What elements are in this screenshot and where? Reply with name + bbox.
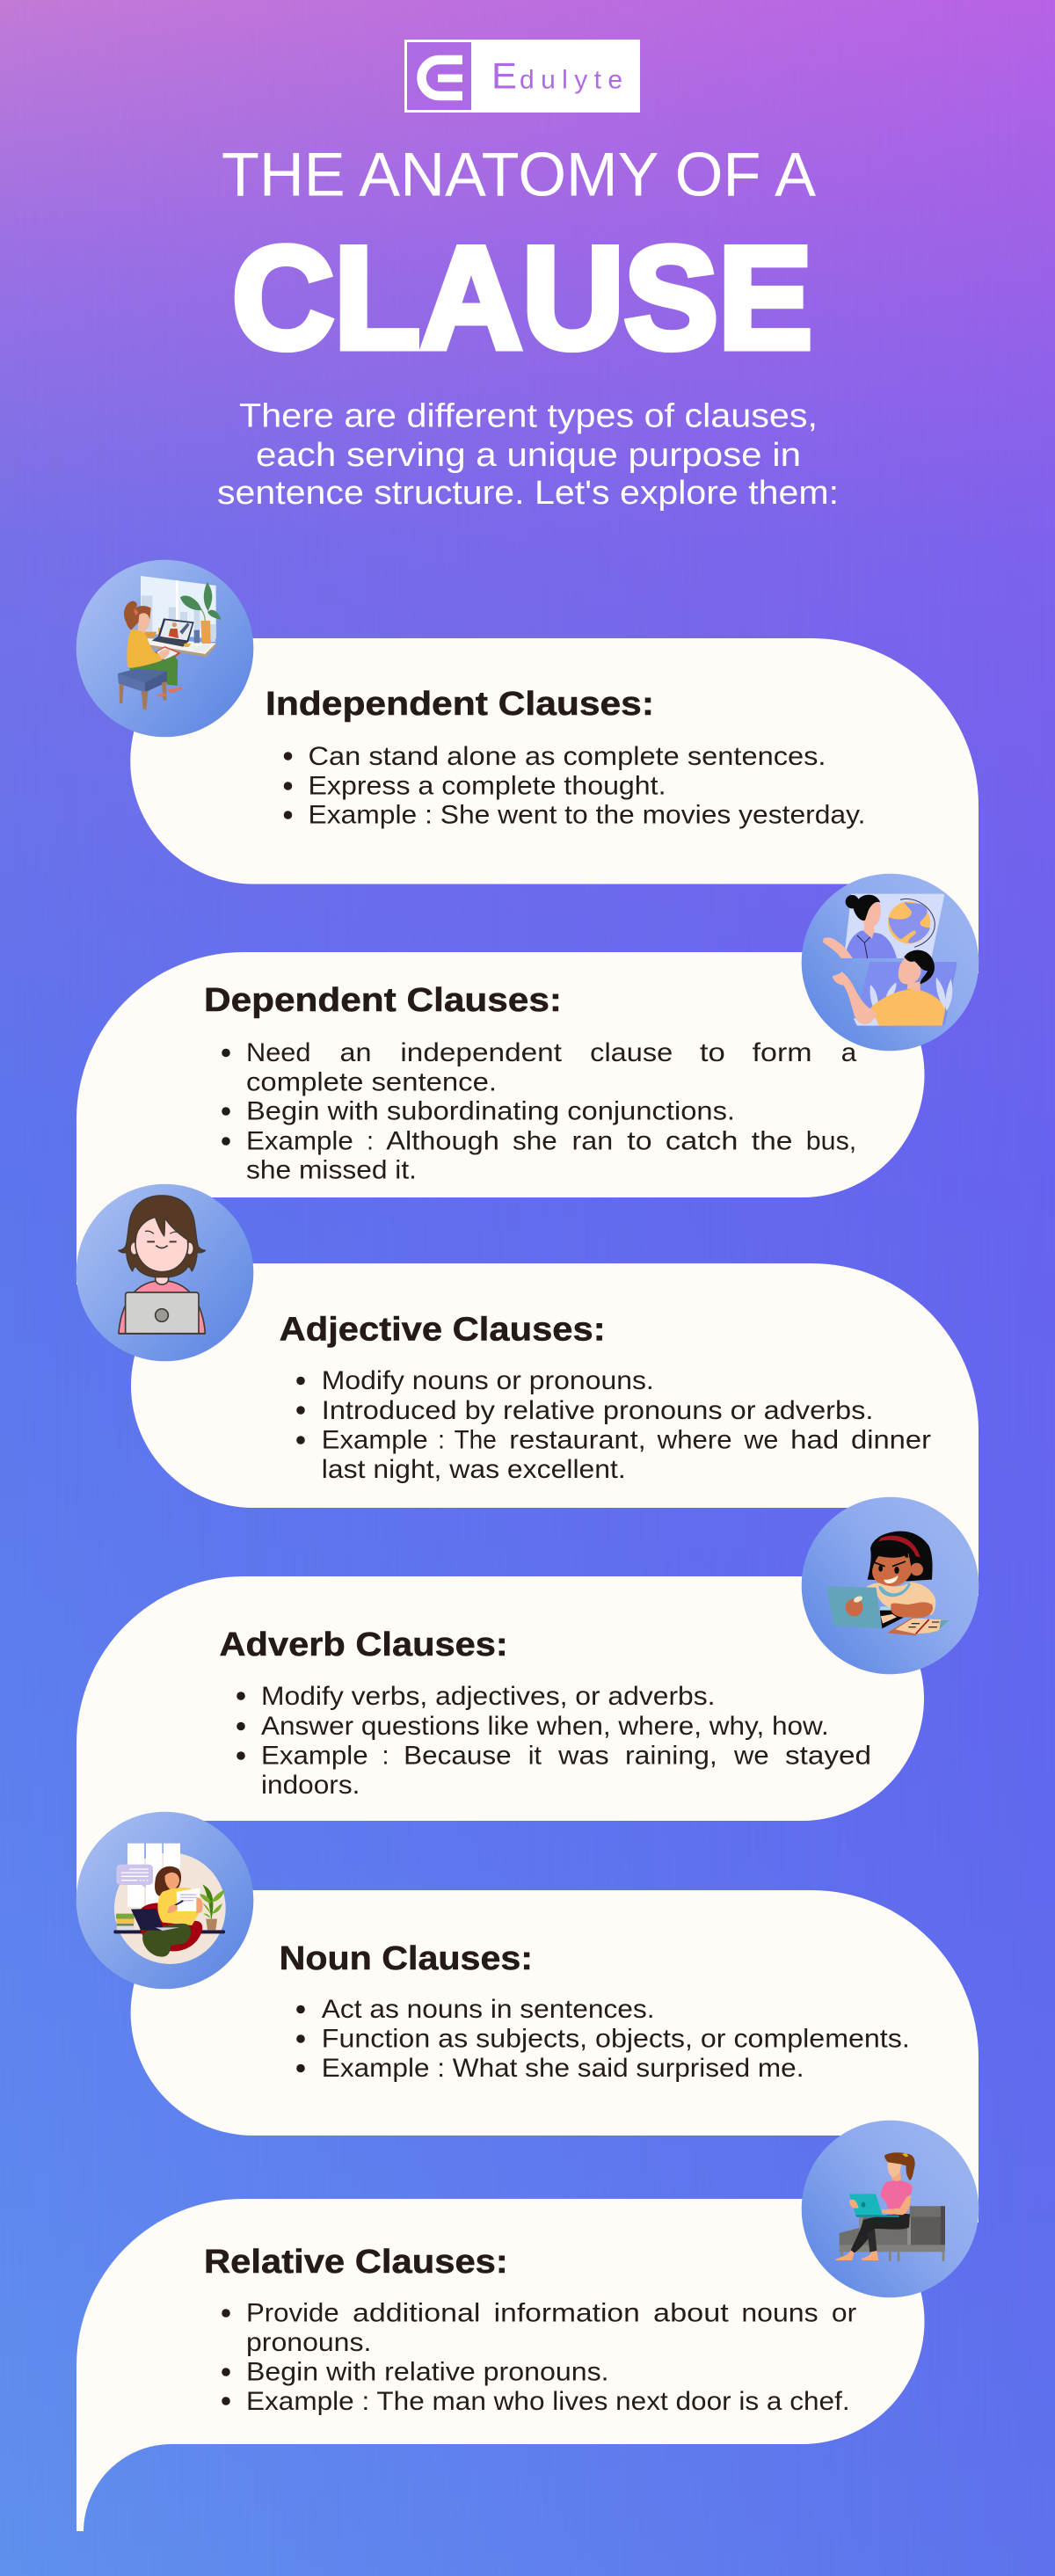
bullet list: dependent clauses: Example: [246, 1127, 353, 1155]
bullet list: independent clauses: Express a complete thought.: [308, 772, 666, 801]
bullet list: relative clauses: Begin with relative pronouns.: [246, 2358, 609, 2387]
bullet list: relative clauses: information: [494, 2298, 640, 2327]
intro paragraph: There are different types of clauses,: [239, 398, 818, 435]
bullet list: adverb clauses: Modify verbs, adjectives, or adverbs.: [261, 1682, 716, 1711]
bullet list: adjective clauses: :: [438, 1425, 445, 1454]
title line: The anatomy of a: THE ANATOMY OF A: [222, 140, 816, 209]
bullet list: noun clauses: Example : What she said surprised me.: [322, 2054, 804, 2083]
icon: woman reading on chair with laptop: [76, 1812, 253, 1989]
intro paragraph: each serving a unique purpose in: [256, 437, 801, 474]
bullet list: relative clauses: Example : The man who lives next door is a chef.: [246, 2387, 850, 2416]
bullet list: adverb clauses: Because: [404, 1742, 512, 1771]
bullet list: dependent clauses: form: [753, 1038, 812, 1067]
bullet list: dependent clauses: :: [367, 1127, 374, 1155]
bullet list: independent clauses: Can stand alone as complete sentences.: [308, 742, 826, 771]
logo: Edulyte: dulyte: [520, 66, 622, 95]
bullet list: dependent clauses: to: [627, 1127, 652, 1155]
bullet list: adjective clauses: Example: [322, 1425, 428, 1454]
panel: noun clauses: [131, 1890, 979, 2223]
bullet list: adjective clauses: had: [790, 1425, 839, 1454]
bullet list: dependent clauses: Need: [246, 1038, 311, 1067]
bullet list: dependent clauses: clause: [590, 1038, 673, 1067]
icon: two people on a video call with globe: [802, 874, 979, 1051]
bullet list: adverb clauses: we: [733, 1742, 769, 1771]
icon: child with laptop and book: [802, 1497, 979, 1674]
bullet list: dependent clauses: the: [752, 1127, 793, 1155]
heading: dependent clauses: Dependent Clauses:: [204, 982, 562, 1019]
bullet list: relative clauses: additional: [353, 2298, 480, 2327]
bullet list: relative clauses: [222, 2298, 856, 2416]
bullet list: adjective clauses: The: [455, 1425, 497, 1454]
bullet list: relative clauses: Provide: [246, 2298, 339, 2327]
heading: relative clauses: Relative Clauses:: [204, 2244, 508, 2281]
bullet list: adverb clauses: it: [528, 1742, 542, 1771]
bullet list: relative clauses: pronouns.: [246, 2328, 371, 2357]
bullet list: adjective clauses: Introduced by relative pronouns or adverbs.: [322, 1396, 873, 1425]
icon: girl with laptop: [76, 1184, 253, 1361]
icon: woman on video call at window desk: [76, 560, 253, 737]
bullet list: adverb clauses: [236, 1682, 871, 1800]
bullet list: dependent clauses: Although: [386, 1127, 499, 1155]
bullet list: adverb clauses: raining,: [625, 1742, 717, 1771]
bullet list: dependent clauses: independent: [400, 1038, 563, 1067]
bullet list: adjective clauses: we: [743, 1425, 778, 1454]
bullet list: dependent clauses: bus,: [806, 1127, 856, 1155]
panel: independent clauses: [130, 638, 979, 973]
title: Clause: CLAUSE: [232, 216, 812, 378]
bullet list: adjective clauses: last night, was excellent.: [322, 1455, 626, 1484]
bullet list: adverb clauses: Example: [261, 1742, 368, 1771]
bullet list: adverb clauses: :: [382, 1742, 389, 1771]
bullet list: adjective clauses: [296, 1366, 931, 1484]
heading: adjective clauses: Adjective Clauses:: [280, 1312, 606, 1349]
panel: relative clauses: [76, 2199, 925, 2531]
bullet list: adverb clauses: was: [557, 1742, 609, 1771]
bullet list: dependent clauses: a: [841, 1038, 857, 1067]
bullet list: relative clauses: nouns: [741, 2298, 819, 2327]
bullet list: adverb clauses: Answer questions like when, where, why, how.: [261, 1712, 829, 1741]
bullet list: dependent clauses: an: [339, 1038, 371, 1067]
logo: Edulyte: [404, 40, 640, 113]
bullet list: dependent clauses: Begin with subordinating conjunctions.: [246, 1097, 735, 1125]
bullet list: adjective clauses: dinner: [851, 1425, 931, 1454]
intro paragraph: [217, 398, 839, 512]
logo: Edulyte: E: [491, 55, 517, 97]
bullet list: relative clauses: or: [832, 2298, 856, 2327]
bullet list: adverb clauses: stayed: [785, 1742, 871, 1771]
bullet list: dependent clauses: she: [513, 1127, 557, 1155]
heading: adverb clauses: Adverb Clauses:: [220, 1626, 508, 1663]
bullet list: adjective clauses: restaurant,: [509, 1425, 646, 1454]
panel: adjective clauses: [131, 1263, 979, 1596]
bullet list: dependent clauses: to: [700, 1038, 725, 1067]
bullet list: adjective clauses: where: [657, 1425, 732, 1454]
heading: independent clauses: Independent Clauses:: [266, 686, 654, 723]
bullet list: independent clauses: [284, 742, 865, 829]
icon: woman on sofa with laptop: [802, 2121, 979, 2297]
bullet list: relative clauses: about: [653, 2298, 730, 2327]
panel: dependent clauses: [76, 952, 925, 1284]
bullet list: adjective clauses: Modify nouns or pronouns.: [322, 1366, 654, 1395]
intro paragraph: sentence structure. Let's explore them:: [217, 475, 839, 512]
bullet list: noun clauses: Function as subjects, objects, or complements.: [322, 2024, 910, 2054]
bullet list: dependent clauses: complete sentence.: [246, 1067, 497, 1096]
bullet list: adverb clauses: indoors.: [261, 1771, 360, 1800]
bullet list: independent clauses: Example : She went to the movies yesterday.: [308, 800, 865, 829]
bullet list: dependent clauses: ran: [571, 1127, 613, 1155]
panel: adverb clauses: [76, 1576, 924, 1903]
bullet list: noun clauses: [296, 1995, 910, 2083]
heading: noun clauses: Noun Clauses:: [280, 1940, 533, 1977]
bullet list: noun clauses: Act as nouns in sentences.: [322, 1995, 655, 2024]
bullet list: dependent clauses: catch: [666, 1127, 738, 1155]
bullet list: dependent clauses: [222, 1038, 857, 1184]
bullet list: dependent clauses: she missed it.: [246, 1155, 417, 1184]
